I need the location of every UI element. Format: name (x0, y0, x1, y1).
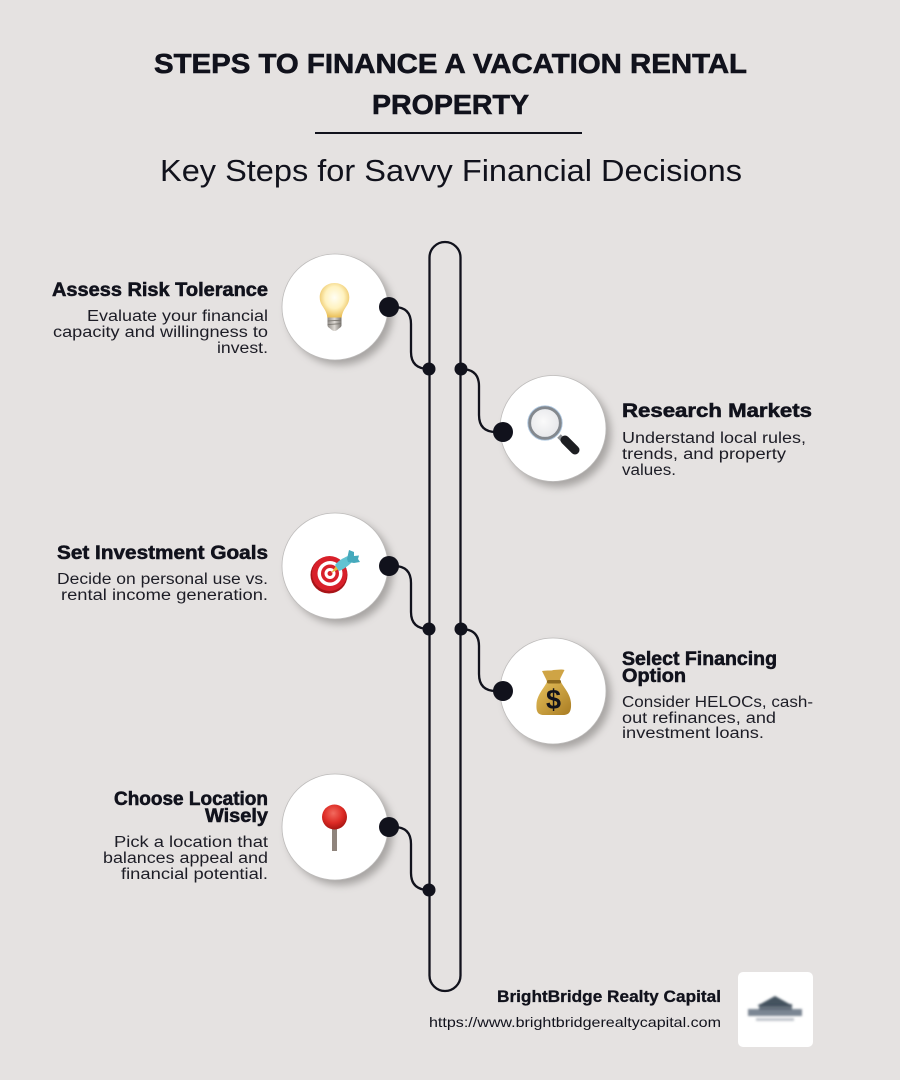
step 1 heading: Assess Risk Tolerance (52, 280, 268, 301)
step 2 connector (454, 362, 513, 442)
title: PROPERTY (372, 89, 529, 120)
step 3 description: rental income generation. (61, 587, 268, 604)
title underline (315, 132, 582, 134)
step 5 description: balances appeal and (103, 850, 268, 867)
step 5 heading (114, 789, 268, 827)
step 1 connector (379, 297, 436, 376)
step 4 description: out refinances, and (622, 710, 776, 727)
step 4 connector (454, 622, 513, 701)
step 2: research markets (454, 362, 812, 487)
title: STEPS TO FINANCE A VACATION RENTAL (154, 48, 747, 79)
step 4 badge (500, 638, 611, 749)
icon: money bag: $ (546, 684, 561, 715)
timeline track (430, 242, 460, 991)
step 4: select financing option (454, 622, 813, 749)
step 1 description (53, 308, 268, 357)
step 2 badge (500, 376, 611, 487)
icon: magnifying glass (528, 406, 575, 450)
step 2 description: trends, and property (622, 446, 786, 463)
step 3: set investment goals (57, 513, 436, 636)
step 4 heading: Select Financing (622, 649, 777, 670)
step 3 description (57, 571, 268, 604)
step 5 description: financial potential. (121, 866, 268, 883)
step 4 description: Consider HELOCs, cash- (622, 694, 813, 711)
step 5 heading: Choose Location (114, 789, 268, 810)
step 4 heading (622, 649, 777, 687)
step 5 badge (282, 774, 393, 885)
step 3 connector (379, 556, 436, 636)
step 1 description: Evaluate your financial (87, 308, 268, 325)
step 5: choose location wisely (103, 774, 436, 896)
step 2 description (622, 430, 806, 479)
subtitle: Key Steps for Savvy Financial Decisions (160, 153, 742, 188)
footer company name: BrightBridge Realty Capital (497, 988, 721, 1006)
step 5 description: Pick a location that (114, 834, 269, 851)
logo card (738, 972, 813, 1047)
icon: round pushpin (322, 804, 347, 851)
step 3 heading: Set Investment Goals (57, 543, 268, 564)
step 2 heading: Research Markets (622, 401, 812, 422)
step 1 description: capacity and willingness to (53, 324, 268, 341)
step 3 description: Decide on personal use vs. (57, 571, 268, 588)
step 4 description: investment loans. (622, 725, 764, 742)
step 1 badge (282, 254, 393, 365)
step 4 heading: Option (622, 666, 686, 687)
step 2 description: values. (622, 462, 676, 479)
step 2 description: Understand local rules, (622, 430, 806, 447)
title (154, 48, 747, 120)
icon: dart target (310, 550, 360, 594)
step 1 description: invest. (217, 340, 268, 357)
step 4 description (622, 694, 813, 742)
step 5 description (103, 834, 269, 883)
logo: building mark (748, 996, 802, 1021)
step 5 connector (379, 817, 436, 896)
step 5 heading: Wisely (205, 806, 268, 827)
step 3 badge (282, 513, 393, 624)
step 1: assess risk tolerance (52, 254, 436, 376)
footer url: https://www.brightbridgerealtycapital.com (429, 1014, 721, 1030)
icon: light bulb (320, 283, 349, 331)
